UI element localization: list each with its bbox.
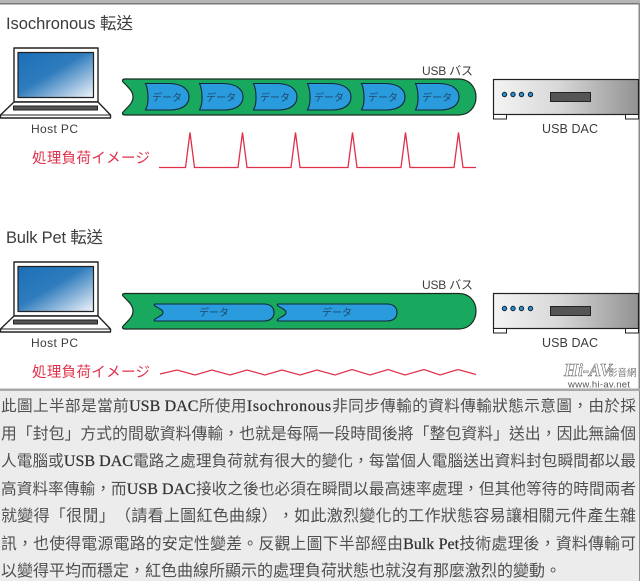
USB bus <box>123 294 476 329</box>
diagram <box>0 0 640 391</box>
icon: host PC laptop <box>0 48 110 118</box>
text block: explanation: 高資料率傳輸，而USB DAC接收之後也必須在瞬間以最高速率處理，但其他等待的時間兩者 <box>1 480 636 498</box>
packet labels: データ <box>199 306 229 319</box>
icon: USB DAC <box>494 294 638 333</box>
watermark: Hi-AV <box>563 360 614 380</box>
label: host PC: Host PC <box>31 336 78 350</box>
packet labels: データ <box>314 91 344 104</box>
packet labels: データ <box>206 91 236 104</box>
text block: explanation: 用「封包」方式的間歇資料傳輸，也就是每隔一段時間後將「整包資料」送出，因此無論個 <box>1 426 636 442</box>
text block: explanation: 此圖上半部是當前USB DAC所使用Isochronous非同步傳輸的資料傳輸狀態示意圖，由於採 <box>1 398 636 414</box>
text block: explanation: 以變得平均而穩定，紅色曲線所顯示的處理負荷狀態也就沒有那麼激烈的變動。 <box>1 562 561 580</box>
packet labels: データ <box>260 91 290 104</box>
data packets <box>146 84 459 110</box>
right border <box>638 391 640 581</box>
text block: explanation <box>0 391 640 581</box>
label: processing load: 処理負荷イメージ <box>32 150 150 167</box>
panel: isochronous transfer <box>0 14 638 168</box>
chart: smooth load line <box>160 370 476 375</box>
watermark: www.hi-av.net <box>567 380 630 390</box>
label: host PC: Host PC <box>31 122 78 136</box>
USB bus <box>123 79 476 115</box>
packet labels: データ <box>422 91 452 104</box>
watermark: 影音網 <box>608 367 637 379</box>
label: USB bus: USB バス <box>422 278 473 292</box>
chart: spiky load line <box>159 132 476 168</box>
packet labels <box>152 91 452 104</box>
panel: bulk pet transfer <box>0 228 638 381</box>
text block: explanation: 訊，也使得電源電路的安定性變差。反觀上圖下半部經由Bulk Pet技術處理後，資料傳輸可 <box>1 536 636 552</box>
heading: isochronous: Isochronous 転送 <box>6 14 134 33</box>
packet labels: データ <box>152 91 182 104</box>
icon: USB DAC <box>494 80 638 119</box>
label: USB DAC: USB DAC <box>542 336 598 350</box>
data packets <box>154 304 397 321</box>
text block: explanation: 就變得「很閒」（請看上圖紅色曲線），如此激烈變化的工作狀態容易讓相關元件產生雜 <box>1 508 636 524</box>
packet labels <box>199 306 352 319</box>
label: processing load: 処理負荷イメージ <box>32 364 150 381</box>
watermark <box>563 360 637 390</box>
heading: bulk pet: Bulk Pet 転送 <box>6 228 104 247</box>
packet labels: データ <box>368 91 398 104</box>
text block: explanation: 人電腦或USB DAC電路之處理負荷就有很大的變化，每當個人電腦送出資料封包瞬間都以最 <box>1 452 636 470</box>
packet labels: データ <box>322 306 352 319</box>
icon: host PC laptop <box>0 262 110 332</box>
label: USB bus: USB バス <box>422 64 473 78</box>
label: USB DAC: USB DAC <box>542 122 598 136</box>
